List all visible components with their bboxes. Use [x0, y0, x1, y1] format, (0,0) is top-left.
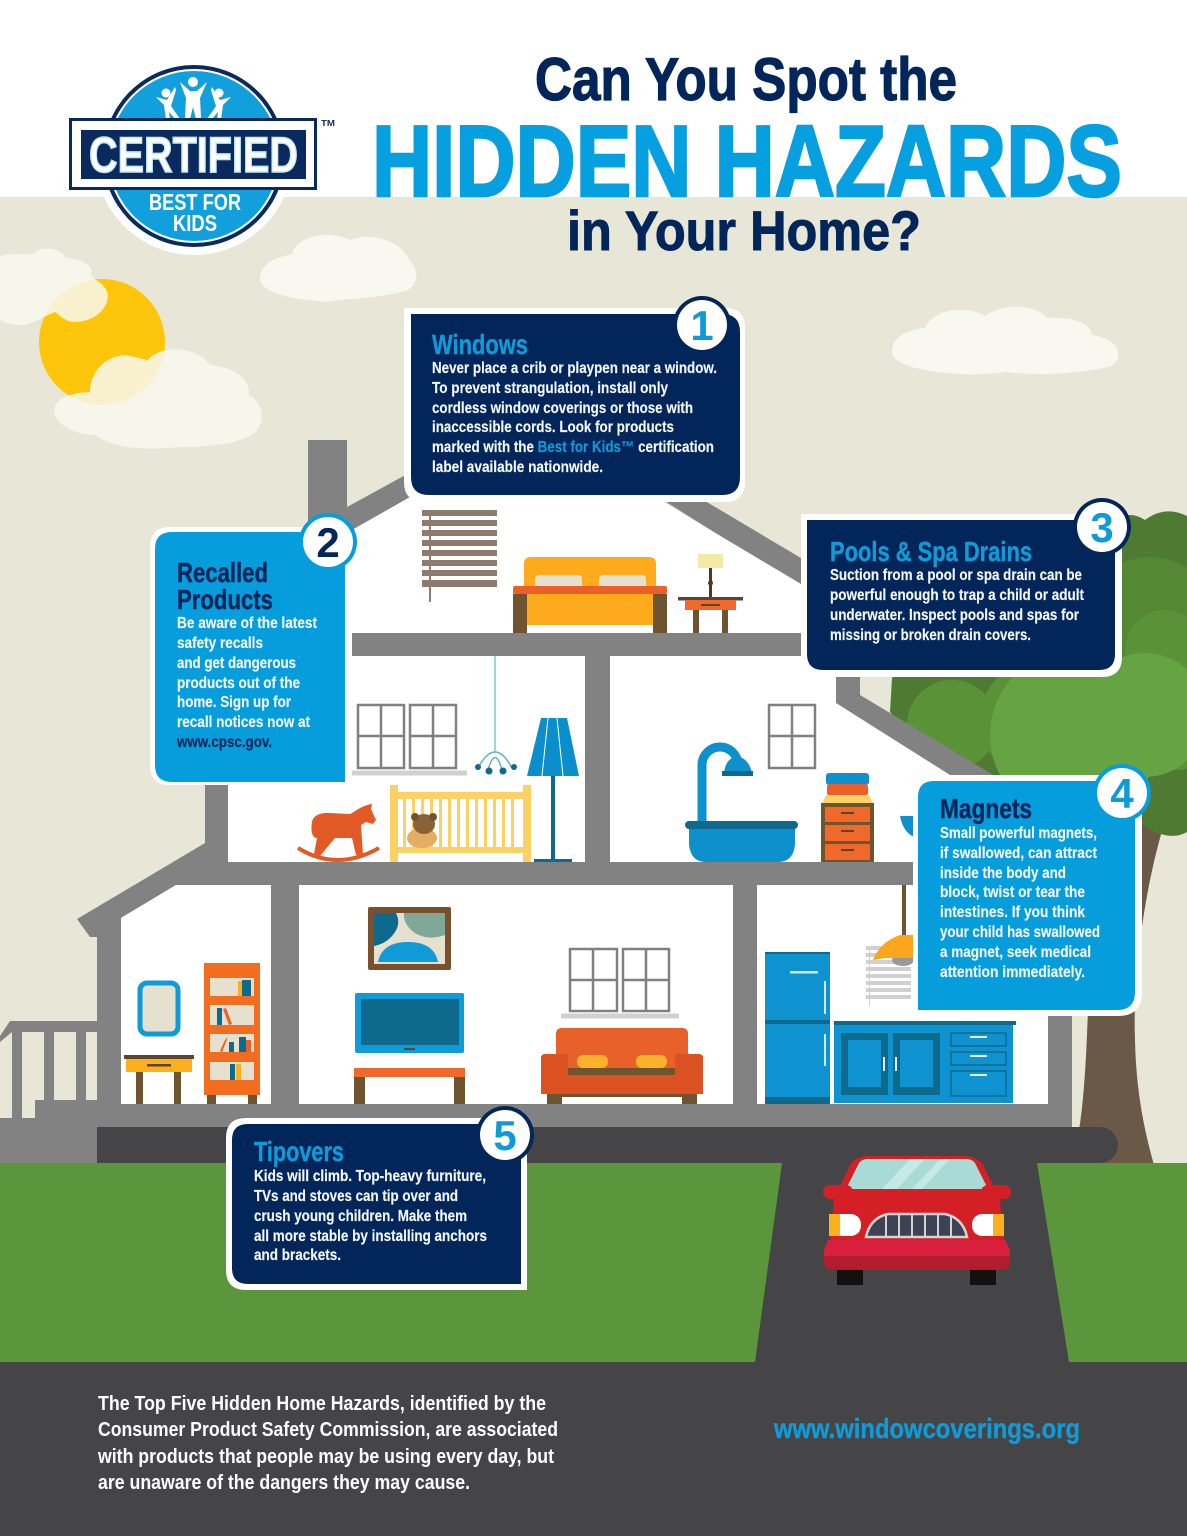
panel: 3 pools and spa drains [801, 498, 1131, 677]
refrigerator [765, 952, 830, 1104]
text: windows advice: inaccessible cords. Look for products [432, 419, 674, 436]
window, nursery [352, 705, 467, 773]
heading: recalled products [177, 557, 273, 615]
text: pool advice [830, 567, 1084, 644]
text: magnets advice: inside the body and [940, 865, 1066, 882]
badge: 1 [673, 296, 731, 354]
lower right roof [836, 676, 995, 776]
footer text: Consumer Product Safety Commission, are associated [98, 1419, 558, 1441]
text: windows advice: cordless window coverings or those with [432, 400, 693, 417]
title [372, 46, 1122, 262]
nightstand and lamp [678, 554, 743, 633]
text: recall advice: home. Sign up for [177, 694, 291, 711]
bed [513, 557, 667, 633]
text: magnets advice [940, 825, 1100, 981]
dresser with towels [821, 773, 874, 862]
framed picture [368, 907, 451, 970]
logo: certified wordmark: CERTIFIED [89, 127, 298, 183]
website: www.windowcoverings.org [773, 1413, 1080, 1444]
text: magnets advice: Small powerful magnets, [940, 825, 1097, 842]
text: pool advice: missing or broken drain covers. [830, 627, 1031, 644]
kitchen blind [866, 946, 911, 1006]
text: tipovers advice: all more stable by installing anchors [254, 1228, 487, 1245]
badge: 3: 3 [1090, 504, 1114, 551]
title: line 1: Can You Spot the [535, 46, 957, 113]
bookcase [204, 963, 260, 1104]
text: recall advice [176, 615, 317, 751]
badge: 2: 2 [316, 519, 340, 566]
attic walls [345, 429, 806, 640]
heading: tipovers: Tipovers [254, 1136, 344, 1167]
badge: 1: 1 [690, 302, 714, 349]
rocking horse [298, 804, 379, 860]
text: pool advice: powerful enough to trap a child or adult [830, 587, 1084, 604]
text: pool advice: underwater. Inspect pools and spas for [830, 607, 1079, 624]
text: recall advice: Be aware of the latest [177, 615, 317, 632]
text: windows advice: marked with the Best for Kids™ certification [432, 439, 714, 456]
ground floor rooms [121, 885, 1048, 1104]
panel: 1 windows [404, 296, 745, 502]
sun [39, 279, 165, 405]
text: tipovers advice [254, 1168, 487, 1264]
text: magnets advice: your child has swallowed [940, 924, 1100, 941]
tv stand [354, 1068, 465, 1104]
second floor rooms [228, 650, 950, 870]
upper slab and centre wall [352, 633, 804, 865]
text: windows advice: label available nationwide. [432, 459, 603, 476]
text: recall advice: www.cpsc.gov. [176, 734, 272, 751]
footer text [97, 1393, 558, 1494]
steps [0, 1100, 97, 1165]
heading: recalled products: Products [177, 584, 273, 615]
badge: 5: 5 [493, 1112, 517, 1159]
mirror [140, 983, 178, 1034]
text: windows advice [432, 360, 717, 476]
ceiling lamp [873, 885, 915, 966]
footer band [0, 1362, 1187, 1536]
logo: children figures [156, 77, 231, 120]
footer text: with products that people may be using every day, but [97, 1446, 554, 1468]
heading: pools and spa drains: Pools & Spa Drains [830, 536, 1032, 567]
badge: 5 [476, 1106, 534, 1164]
logo: trademark: TM [321, 119, 335, 128]
ground floor wall and slab [97, 885, 1072, 1127]
badge: 3 [1073, 498, 1131, 556]
floor lamp [527, 718, 579, 862]
car [823, 1156, 1011, 1285]
foundation [97, 1127, 1118, 1163]
text: recall advice: and get dangerous [177, 655, 296, 672]
side table [124, 1055, 194, 1104]
footer text: The Top Five Hidden Home Hazards, identified by the [98, 1393, 546, 1415]
logo: best for kids: BEST FOR [149, 189, 241, 215]
television [355, 993, 464, 1053]
heading: magnets: Magnets [940, 793, 1032, 824]
kitchen counter [834, 1021, 1016, 1103]
cloud top centre [260, 235, 416, 302]
text: tipovers advice: TVs and stoves can tip over and [254, 1188, 458, 1205]
badge: 4 [1093, 764, 1151, 822]
tree [890, 511, 1187, 1165]
heading: recalled products: Recalled [177, 557, 268, 588]
cloud upper left [0, 249, 108, 325]
panel: 4 magnets [913, 764, 1151, 1016]
text: windows advice: Never place a crib or playpen near a window. [432, 360, 717, 377]
crib [390, 785, 531, 862]
text: tipovers advice: and brackets. [254, 1247, 341, 1264]
house structure [0, 429, 1118, 1165]
cloud right [892, 306, 1118, 374]
driveway [755, 1163, 1069, 1362]
panel: 2 recalled products [150, 513, 357, 785]
text: magnets advice: block, twist or tear the [940, 884, 1085, 901]
lawn [0, 1163, 1187, 1362]
chimney and roof [308, 440, 440, 560]
window, living room [561, 949, 679, 1016]
text: magnets advice: intestines. If you think [940, 904, 1085, 921]
sofa [541, 1028, 703, 1104]
text: magnets advice: if swallowed, can attract [940, 845, 1097, 862]
text: tipovers advice: Kids will climb. Top-heavy furniture, [254, 1168, 486, 1185]
badge: 2 [299, 513, 357, 571]
badge: 4: 4 [1110, 770, 1134, 817]
text: pool advice: Suction from a pool or spa drain can be [830, 567, 1082, 584]
title: line 3: in Your Home? [567, 199, 921, 262]
text: magnets advice: attention immediately. [940, 964, 1085, 981]
text: recall advice: safety recalls [177, 635, 263, 652]
second floor slab and left roof [77, 785, 930, 1104]
heading: windows: Windows [432, 329, 528, 360]
crib mobile [475, 656, 517, 774]
logo [69, 57, 335, 255]
logo: kids: KIDS [173, 210, 217, 236]
railing [0, 1021, 97, 1118]
sink bowl [900, 816, 914, 837]
cloud cluster near sun [54, 349, 262, 449]
text: tipovers advice: crush young children. Make them [254, 1208, 467, 1225]
footer text: are unaware of the dangers they may cause. [98, 1472, 470, 1494]
window, bathroom [769, 705, 815, 768]
bathtub and shower [685, 747, 798, 862]
text: windows advice: To prevent strangulation, install only [432, 380, 668, 397]
window blind, attic [422, 510, 497, 602]
text: magnets advice: a magnet, seek medical [940, 944, 1091, 961]
panel: 5 tipovers [226, 1106, 534, 1290]
text: recall advice: recall notices now at [177, 714, 310, 731]
text: recall advice: products out of the [177, 675, 300, 692]
